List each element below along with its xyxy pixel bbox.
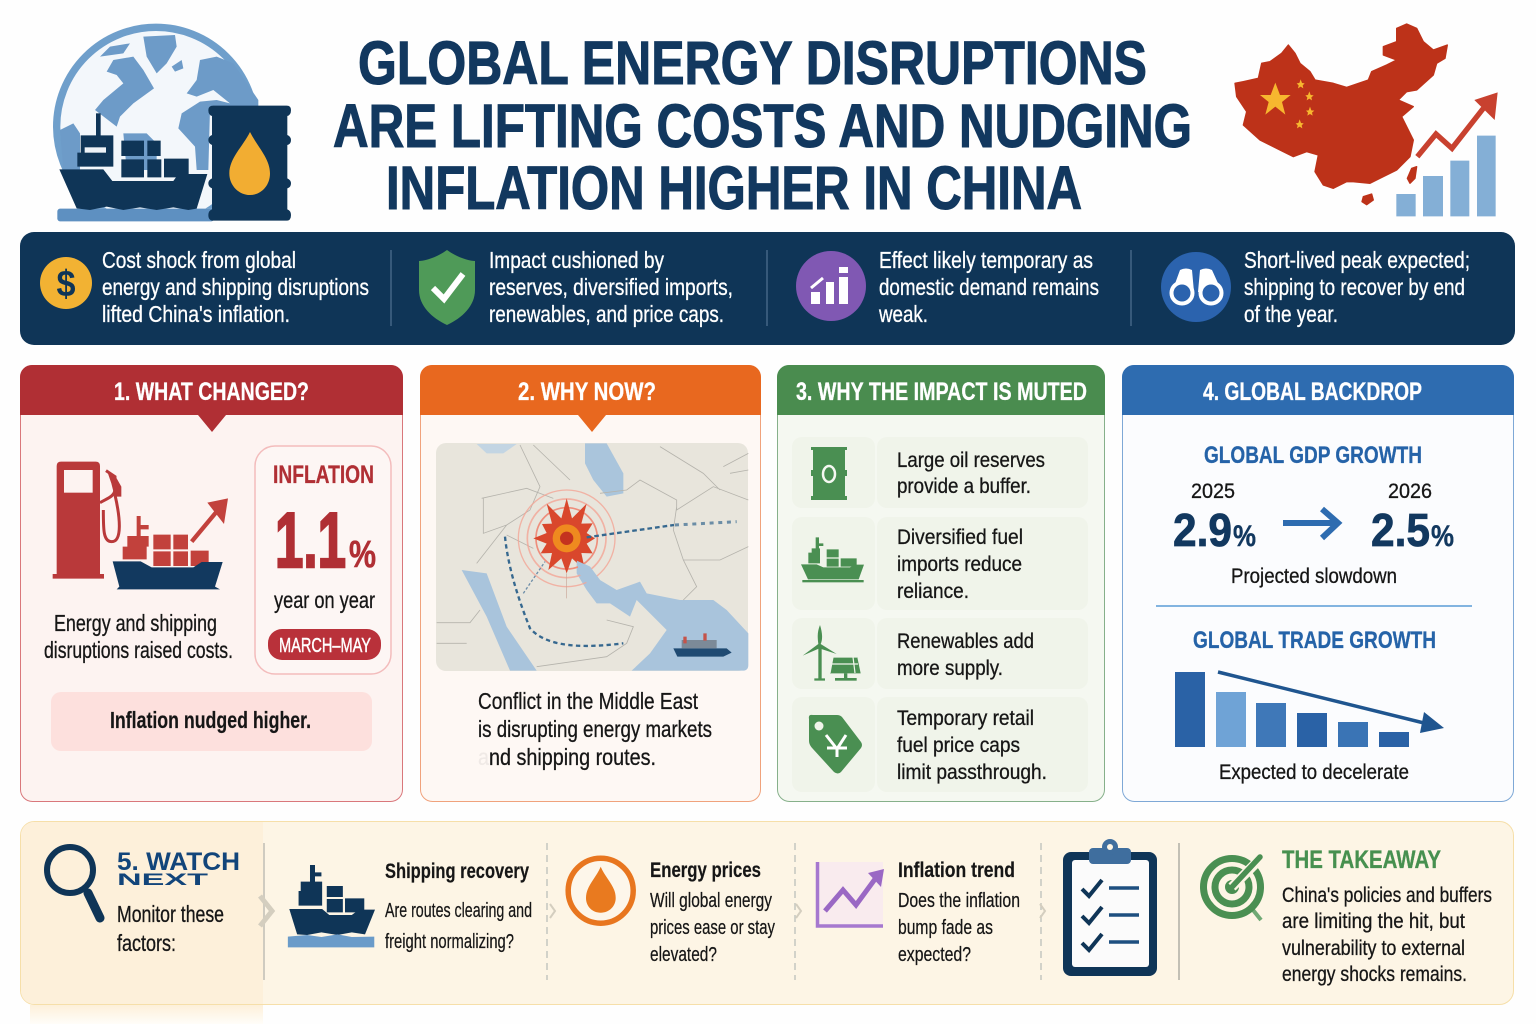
text: short-lived peak: shipping to recover by end	[1244, 274, 1465, 300]
icon: globe with cargo ship and oil barrel	[57, 27, 291, 226]
text: conflict: and shipping routes.	[478, 744, 656, 770]
heading: 1. WHAT CHANGED?	[114, 378, 309, 406]
icon: dollar coin: $	[56, 263, 76, 304]
row: price caps: fuel price caps	[897, 734, 1020, 757]
text: effect temporary: weak.	[878, 301, 928, 327]
text: shipping recovery: Shipping recovery	[385, 860, 529, 883]
callout: inflation stat: %	[349, 534, 376, 576]
icon: binoculars	[1161, 252, 1231, 322]
text: impact cushioned: renewables, and price caps.	[489, 301, 724, 327]
callout: inflation stat: 1.1	[275, 496, 346, 584]
icon: energy drop	[568, 858, 633, 923]
chart: global trade growth: GLOBAL TRADE GROWTH	[1193, 627, 1436, 654]
text: energy and shipping: Energy and shipping	[54, 610, 217, 636]
panel: 4. global backdrop	[1122, 365, 1514, 802]
text: energy and shipping	[44, 610, 233, 663]
text: short-lived peak	[1244, 247, 1470, 327]
text: effect temporary: domestic demand remains	[879, 274, 1099, 300]
panel: 2. why now	[420, 365, 761, 802]
text: energy prices: elevated?	[650, 944, 717, 966]
text: short-lived peak: of the year.	[1244, 301, 1338, 327]
text: cost shock: energy and shipping disruptions	[102, 274, 369, 300]
text: inflation trend: expected?	[898, 944, 971, 966]
title: GLOBAL ENERGY DISRUPTIONS	[358, 29, 1147, 97]
row: renewables	[792, 618, 1088, 689]
heading: 2. WHY NOW?	[518, 378, 656, 406]
callout: inflation stat: MARCH–MAY	[279, 635, 371, 657]
callout: inflation stat	[255, 446, 391, 674]
text: the takeaway: THE TAKEAWAY	[1282, 846, 1441, 874]
stat: global gdp growth	[1173, 442, 1454, 588]
panel: 1. what changed	[20, 365, 403, 802]
heading: 5. watch next: 5. WATCH	[117, 848, 240, 876]
heading: 4. GLOBAL BACKDROP	[1203, 378, 1422, 406]
icon: shield check	[419, 250, 475, 325]
text: inflation trend	[898, 859, 1020, 966]
stat: global gdp growth: 2.9	[1173, 504, 1232, 556]
text: cost shock: Cost shock from global	[102, 247, 296, 273]
text: shipping recovery: freight normalizing?	[385, 931, 514, 953]
text: the takeaway	[1282, 846, 1492, 986]
icon: inflation trend chart	[817, 862, 884, 926]
text: short-lived peak: Short-lived peak expected;	[1244, 247, 1470, 273]
text: the takeaway: are limiting the hit, but	[1282, 910, 1465, 933]
row: oil reserves	[792, 437, 1088, 508]
row: oil reserves: Large oil reserves	[897, 449, 1045, 472]
row: diversified imports: imports reduce	[897, 553, 1022, 576]
icon: China map with rising chart	[1235, 24, 1498, 216]
icon: target	[1204, 857, 1262, 920]
text: inflation trend: Inflation trend	[898, 859, 1015, 882]
text: energy prices: Will global energy	[650, 890, 772, 912]
text: shipping recovery	[385, 860, 532, 953]
icon: checklist clipboard	[1063, 839, 1157, 976]
text: shipping recovery: Are routes clearing and	[385, 900, 532, 922]
text: energy and shipping: disruptions raised costs.	[44, 637, 233, 663]
row: diversified imports	[792, 517, 1088, 610]
panel: 3. why the impact is muted	[777, 365, 1105, 802]
stat: global gdp growth: %	[1233, 520, 1256, 553]
stat: global gdp growth: %	[1431, 520, 1454, 553]
stat: global gdp growth: 2026	[1388, 480, 1432, 503]
chart: global trade growth: Expected to decelerate	[1219, 761, 1409, 784]
row: price caps	[792, 697, 1088, 792]
row: diversified imports: Diversified fuel	[897, 526, 1023, 549]
text: conflict	[478, 688, 712, 770]
text: cost shock	[102, 247, 369, 327]
map: middle east conflict	[436, 443, 748, 671]
heading: 5. watch next	[117, 848, 240, 956]
text: impact cushioned: Impact cushioned by	[489, 247, 664, 273]
stat: global gdp growth: Projected slowdown	[1231, 565, 1397, 588]
icon: dollar coin	[40, 257, 92, 309]
row: price caps: Temporary retail	[897, 707, 1034, 730]
row: renewables: Renewables add	[897, 630, 1034, 653]
row: renewables: more supply.	[897, 657, 1003, 680]
text: impact cushioned	[489, 247, 733, 327]
title	[333, 29, 1192, 222]
heading: 3. WHY THE IMPACT IS MUTED	[796, 378, 1087, 406]
heading: 5. watch next: NEXT	[117, 870, 209, 889]
icon: cargo ship	[288, 865, 375, 947]
row: price caps: limit passthrough.	[897, 761, 1047, 784]
stat: global gdp growth: GLOBAL GDP GROWTH	[1204, 442, 1422, 469]
text: the takeaway: energy shocks remains.	[1282, 963, 1467, 986]
callout: inflation nudged higher	[51, 692, 372, 751]
stat: global gdp growth: 2.5	[1371, 504, 1430, 556]
row: oil reserves: provide a buffer.	[897, 475, 1031, 498]
callout: inflation stat: INFLATION	[273, 461, 374, 489]
stat: global gdp growth: 2025	[1191, 480, 1235, 503]
icon: fuel pump and ship with arrow	[53, 462, 228, 589]
text: energy prices: Energy prices	[650, 859, 761, 882]
panel: watch next strip	[20, 822, 1514, 1024]
heading: 5. watch next: factors:	[117, 930, 176, 956]
title: ARE LIFTING COSTS AND NUDGING	[333, 92, 1192, 160]
heading: 5. watch next: Monitor these	[117, 901, 224, 927]
icon: purple bar chart	[796, 251, 866, 321]
chart: global trade growth	[1175, 627, 1444, 784]
text: effect temporary	[878, 247, 1099, 327]
text: energy prices: prices ease or stay	[650, 917, 775, 939]
callout: inflation nudged higher: Inflation nudged higher.	[110, 707, 311, 733]
text: conflict: is disrupting energy markets	[478, 716, 712, 742]
text: effect temporary: Effect likely temporary as	[879, 247, 1093, 273]
text: the takeaway: China's policies and buffers	[1282, 884, 1492, 907]
title: INFLATION HIGHER IN CHINA	[386, 154, 1082, 222]
text: cost shock: lifted China's inflation.	[102, 301, 290, 327]
text: conflict: Conflict in the Middle East	[478, 688, 699, 714]
text: inflation trend: bump fade as	[898, 917, 993, 939]
text: energy prices	[650, 859, 775, 966]
panel: summary banner	[20, 232, 1515, 345]
text: inflation trend: Does the inflation	[898, 890, 1020, 912]
text: impact cushioned: reserves, diversified imports,	[489, 274, 733, 300]
text: the takeaway: vulnerability to external	[1282, 937, 1465, 960]
icon: magnifying glass	[47, 847, 100, 918]
row: diversified imports: reliance.	[897, 580, 969, 603]
callout: inflation stat: year on year	[274, 587, 375, 613]
